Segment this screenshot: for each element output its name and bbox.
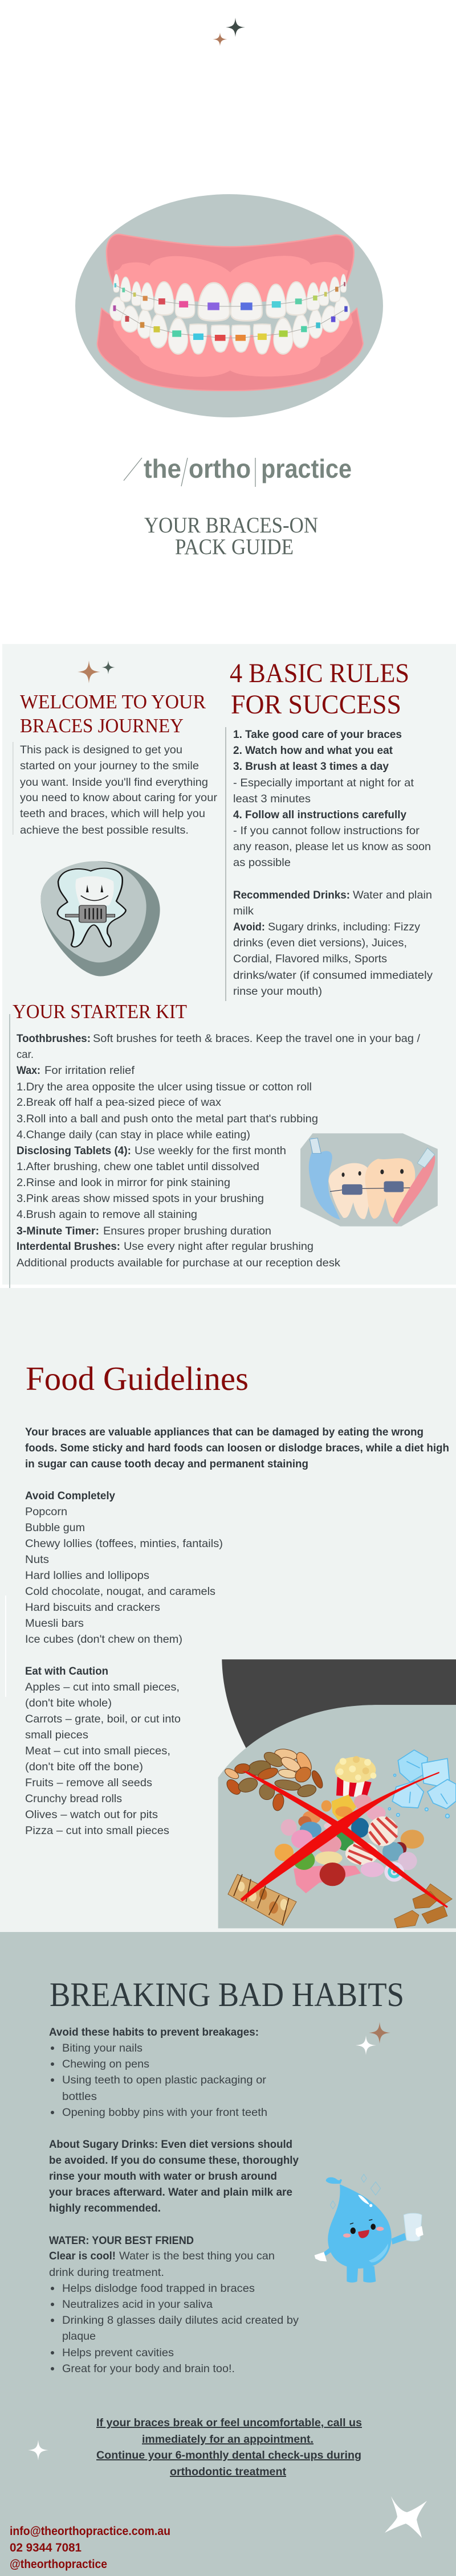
text block: starter kit: 3.Pink areas show missed spots in your brushing [17, 1192, 264, 1205]
logo: the ortho practice: ortho [189, 454, 251, 483]
list: avoid completely: Popcorn [25, 1506, 67, 1518]
text block: starter kit: 2.Rinse and look in mirror for pink staining [17, 1176, 230, 1189]
text block: about sugary drinks: be avoided. If you do consume these, thoroughly [49, 2154, 299, 2167]
text block: welcome intro: This pack is designed to get you [20, 744, 182, 756]
text block: food intro: in sugar can cause tooth decay and permanent staining [25, 1458, 308, 1470]
contact details: 02 9344 7081 [10, 2541, 82, 2554]
text block: rules list: Avoid: [233, 921, 265, 933]
callout: appointment reminder: Continue your 6-monthly dental check-ups during [96, 2449, 361, 2462]
list: avoid completely [25, 1490, 223, 1646]
text block: welcome intro: achieve the best possible results. [20, 824, 189, 836]
text block: welcome intro: started on your journey to the smile [20, 760, 199, 772]
text block: rules list: as possible [233, 856, 291, 869]
text block: starter kit [9, 1014, 421, 1288]
text block: water your best friend: plaque [62, 2330, 96, 2343]
heading: welcome [20, 691, 206, 737]
list: eat with caution: Carrots – grate, boil, or cut into [25, 1713, 181, 1725]
icon: habits sparkles [356, 2022, 390, 2055]
list: eat with caution: Olives – watch out for pits [25, 1808, 158, 1821]
list: eat with caution: Pizza – cut into small pieces [25, 1824, 169, 1837]
text block: rules list: rinse your mouth) [233, 985, 322, 998]
text block: rules list: Cordial, Flavored milks, Sports [233, 953, 387, 965]
list: avoid completely: Nuts [25, 1553, 49, 1566]
text block: water your best friend: Helps dislodge food trapped in braces [62, 2282, 255, 2295]
text block: welcome intro: you need to know about caring for your [20, 791, 218, 804]
text block: welcome intro: you want. Inside you'll find everything [20, 776, 208, 789]
text block: starter kit: Disclosing Tablets (4): [17, 1145, 131, 1157]
illustration: tooth mascot with brace [40, 861, 160, 976]
title: your braces-on pack guide: YOUR BRACES-ON [144, 513, 318, 538]
list: eat with caution: Meat – cut into small pieces, [25, 1745, 170, 1757]
list: habits to avoid: bottles [62, 2090, 97, 2103]
logo: the ortho practice: the [144, 454, 181, 483]
heading: welcome: BRACES JOURNEY [20, 715, 184, 737]
contact details: @theorthopractice [10, 2558, 107, 2571]
logo: the ortho practice [124, 454, 352, 487]
text block: welcome intro: teeth and braces, which will help you [20, 807, 205, 820]
text block: water your best friend: Neutralizes acid in your saliva [62, 2298, 213, 2311]
list: eat with caution: Crunchy bread rolls [25, 1792, 122, 1805]
list: avoid completely: Bubble gum [25, 1521, 85, 1534]
text block: about sugary drinks [49, 2138, 299, 2214]
callout: appointment reminder: If your braces break or feel uncomfortable, call us [96, 2417, 362, 2429]
illustration: foods to avoid crossed out [218, 1659, 456, 1929]
icon: white sparkle left [28, 2440, 48, 2460]
heading: 4 basic rules [230, 658, 409, 720]
text block: starter kit: For irritation relief [44, 1064, 135, 1077]
text block: rules list: drinks (even diet versions), Juices, [233, 937, 407, 949]
text block: food intro: Your braces are valuable appliances that can be damaged by eating the wrong [25, 1426, 424, 1438]
list: avoid completely: Avoid Completely [25, 1490, 115, 1502]
text block: rules list: least 3 minutes [233, 793, 311, 805]
text block: about sugary drinks: About Sugary Drinks: Even diet versions should [49, 2138, 292, 2151]
illustration: teeth with toothbrush and toothpaste [300, 1133, 438, 1227]
heading: your starter kit: YOUR STARTER KIT [13, 1000, 187, 1023]
text block: starter kit: Use every night after regular brushing [124, 1240, 314, 1253]
section backgrounds [0, 644, 456, 2576]
illustration: water drop mascot [315, 2174, 424, 2283]
text block: starter kit: Additional products available for purchase at our reception desk [17, 1257, 340, 1269]
text block: starter kit: 3.Roll into a ball and push onto the metal part that's rubbing [17, 1113, 318, 1125]
text block: starter kit: 2.Break off half a pea-sized piece of wax [17, 1096, 221, 1109]
list: avoid completely: Chewy lollies (toffees, minties, fantails) [25, 1537, 223, 1550]
text block: rules list: - If you cannot follow instructions for [233, 825, 420, 837]
list: eat with caution: Eat with Caution [25, 1665, 108, 1677]
text block: welcome intro [13, 742, 218, 836]
text block: rules list [225, 727, 433, 1001]
text block: rules list: 1. Take good care of your braces [233, 728, 402, 741]
text block: rules list: milk [233, 905, 254, 917]
text block: starter kit: Interdental Brushes: [17, 1240, 120, 1253]
text block: starter kit: Toothbrushes: [17, 1032, 91, 1045]
text block: about sugary drinks: highly recommended. [49, 2202, 161, 2214]
heading: 4 basic rules: 4 BASIC RULES [230, 658, 409, 688]
text block: rules list: 3. Brush at least 3 times a day [233, 760, 389, 773]
text block: water your best friend: Helps prevent cavities [62, 2347, 174, 2359]
list: eat with caution [25, 1665, 181, 1837]
text block: water your best friend: WATER: YOUR BEST FRIEND [49, 2234, 194, 2247]
list: habits to avoid: Avoid these habits to prevent breakages: [49, 2026, 259, 2038]
callout: appointment reminder: immediately for an appointment. [142, 2433, 314, 2446]
text block: rules list: 2. Watch how and what you eat [233, 744, 393, 757]
logo: the ortho practice: practice [261, 454, 352, 483]
title: your braces-on pack guide: PACK GUIDE [175, 535, 294, 559]
text block: rules list: any reason, please let us know as soon [233, 840, 431, 853]
text block: about sugary drinks: your braces afterward. Water and plain milk are [49, 2186, 292, 2198]
text block: starter kit: Use weekly for the first month [135, 1145, 286, 1157]
list: avoid completely: Ice cubes (don't chew on them) [25, 1633, 182, 1646]
text block: rules list: 4. Follow all instructions carefully [233, 809, 406, 821]
text block: starter kit: Wax: [17, 1064, 40, 1077]
list: eat with caution: Fruits – remove all seeds [25, 1777, 152, 1789]
text block: starter kit: car. [17, 1048, 34, 1061]
text block: water your best friend: Great for your body and brain too!. [62, 2362, 235, 2375]
icon: welcome sparkles [78, 661, 115, 683]
heading: food guidelines: Food Guidelines [26, 1360, 249, 1397]
list: eat with caution: small pieces [25, 1729, 88, 1741]
text block: food intro: foods. Some sticky and hard foods can loosen or dislodge braces, while a diet high [25, 1442, 449, 1454]
callout: appointment reminder: orthodontic treatment [170, 2466, 286, 2478]
text block: starter kit: 1.Dry the area opposite the ulcer using tissue or cotton roll [17, 1081, 312, 1093]
heading: 4 basic rules: FOR SUCCESS [231, 690, 401, 720]
text block: rules list: Water and plain [353, 889, 432, 901]
text block: starter kit: 1.After brushing, chew one tablet until dissolved [17, 1160, 259, 1173]
callout: appointment reminder [96, 2417, 362, 2478]
icon: large white sparkle [385, 2496, 427, 2538]
heading: welcome: WELCOME TO YOUR [20, 691, 206, 713]
list: eat with caution: (don't bite off the bone) [25, 1761, 143, 1773]
list: avoid completely: Cold chocolate, nougat, and caramels [25, 1585, 215, 1598]
text block: water your best friend: Drinking 8 glasses daily dilutes acid created by [62, 2314, 299, 2327]
text block: starter kit: 3-Minute Timer: [17, 1225, 99, 1237]
list: habits to avoid [49, 2026, 267, 2119]
text block: rules list: drinks/water (if consumed immediately [233, 969, 433, 982]
list: habits to avoid: Chewing on pens [62, 2058, 149, 2070]
text block: food intro [25, 1426, 449, 1470]
contact details: info@theorthopractice.com.au [10, 2525, 170, 2538]
list: avoid completely: Muesli bars [25, 1617, 84, 1630]
text block: rules list: - Especially important at night for at [233, 777, 414, 789]
heading: breaking bad habits: BREAKING BAD HABITS [50, 1976, 404, 2013]
icon: top sparkles [213, 18, 245, 46]
list: avoid completely: Hard biscuits and crackers [25, 1601, 160, 1614]
list: avoid completely: Hard lollies and lollipops [25, 1569, 149, 1582]
illustration: teeth with braces [75, 194, 383, 417]
list: eat with caution: Apples – cut into small pieces, [25, 1681, 180, 1693]
contact details [10, 2525, 170, 2571]
text block: water your best friend: drink during treatment. [49, 2266, 164, 2279]
text block: rules list: Sugary drinks, including: Fizzy [268, 921, 420, 933]
text block: starter kit: Soft brushes for teeth & braces. Keep the travel one in your bag / [93, 1032, 421, 1045]
list: habits to avoid: Using teeth to open plastic packaging or [62, 2074, 267, 2086]
text block: water your best friend: Water is the best thing you can [119, 2250, 275, 2262]
list: habits to avoid: Biting your nails [62, 2042, 142, 2054]
title: your braces-on pack guide [144, 513, 318, 559]
text block: water your best friend [49, 2234, 299, 2375]
text block: about sugary drinks: rinse your mouth with water or brush around [49, 2170, 277, 2183]
text block: starter kit: 4.Brush again to remove all staining [17, 1208, 197, 1221]
text block: rules list: Recommended Drinks: [233, 889, 350, 901]
list: habits to avoid: Opening bobby pins with your front teeth [62, 2106, 267, 2119]
text block: starter kit: 4.Change daily (can stay in place while eating) [17, 1129, 250, 1141]
text block: starter kit: Ensures proper brushing duration [103, 1225, 271, 1237]
text block: water your best friend: Clear is cool! [49, 2250, 116, 2262]
list: eat with caution: (don't bite whole) [25, 1697, 112, 1709]
